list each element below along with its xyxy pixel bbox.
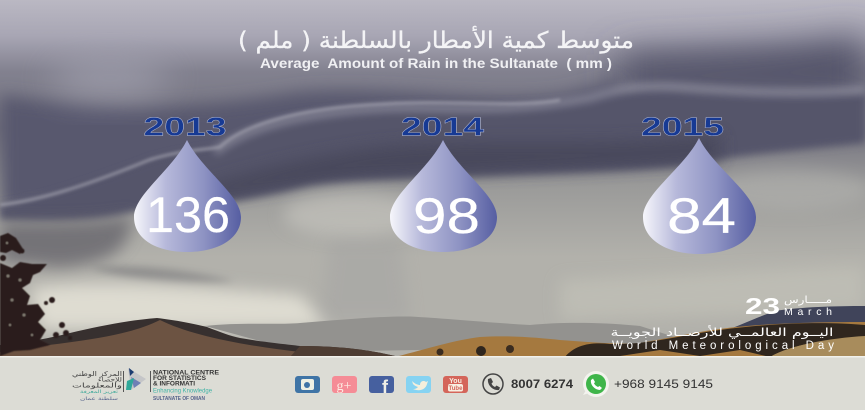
icon: telephone (483, 374, 503, 394)
drop: 2014: 98 (413, 188, 480, 244)
logo: National Centre for Statistics & Information: FOR STATISTICS (153, 376, 206, 382)
logo: National Centre for Statistics & Information: Enhancing Knowledge (153, 388, 213, 394)
logo: National Centre for Statistics & Information: & INFORMATI (153, 382, 195, 388)
logo: National Centre for Statistics & Information: للإحصاء (98, 376, 122, 384)
drop: 2015 (641, 112, 756, 254)
title: English: Average Amount of Rain in the Sultanate ( mm ) (260, 56, 612, 71)
icon: Twitter (406, 376, 431, 393)
icon: YouTube: Tube (449, 386, 463, 392)
event label: World Meteorological Day: March (784, 306, 832, 318)
icon: Instagram (295, 376, 320, 393)
footer band (0, 356, 865, 410)
icon: Facebook (369, 376, 394, 397)
logo: National Centre for Statistics & Information (72, 368, 219, 402)
event label: World Meteorological Day (610, 293, 834, 352)
logo: National Centre for Statistics & Information: والمعلومات (72, 382, 122, 390)
icon: WhatsApp (583, 371, 609, 397)
icon: YouTube (443, 376, 468, 393)
phone number: 8007 6274 (511, 379, 574, 391)
drop: 2015: 2015 (641, 112, 724, 142)
event label: World Meteorological Day: مـــــارس (784, 295, 832, 306)
event label: World Meteorological Day: اليــوم العالمــي للأرصــاد الجويــة (610, 325, 834, 340)
drop: 2015: 84 (667, 188, 736, 244)
tree at left (0, 233, 72, 356)
distant hills (205, 306, 865, 352)
drop: 2013 (134, 112, 241, 252)
logo: National Centre for Statistics & Information: تعزيز المعرفة (80, 390, 119, 395)
logo: National Centre for Statistics & Information: سلطنة عمان (80, 397, 118, 402)
icon: YouTube: You (449, 378, 462, 385)
logo: National Centre for Statistics & Information: NATIONAL CENTRE (153, 370, 219, 376)
icon: Google Plus (332, 376, 357, 394)
drop: 2014: 2014 (401, 112, 485, 142)
drop: 2013: 136 (146, 187, 230, 243)
foreground hills (0, 318, 865, 357)
logo: National Centre for Statistics & Information: SULTANATE OF OMAN (153, 396, 205, 402)
icon: Google Plus: g+ (337, 379, 352, 394)
title: Arabic: متوسط كمية الأمطار بالسلطنة ( ملم ) (238, 26, 634, 54)
event label: World Meteorological Day: World Meteorological Day (612, 340, 834, 352)
drop: 2013: 2013 (144, 112, 226, 142)
logo: National Centre for Statistics & Information: المركز الوطني (72, 370, 122, 378)
WhatsApp number: +968 9145 9145 (614, 379, 713, 391)
drop: 2014 (390, 112, 497, 252)
event label: World Meteorological Day: 23 (745, 293, 780, 319)
icon: Facebook: f (382, 377, 389, 397)
